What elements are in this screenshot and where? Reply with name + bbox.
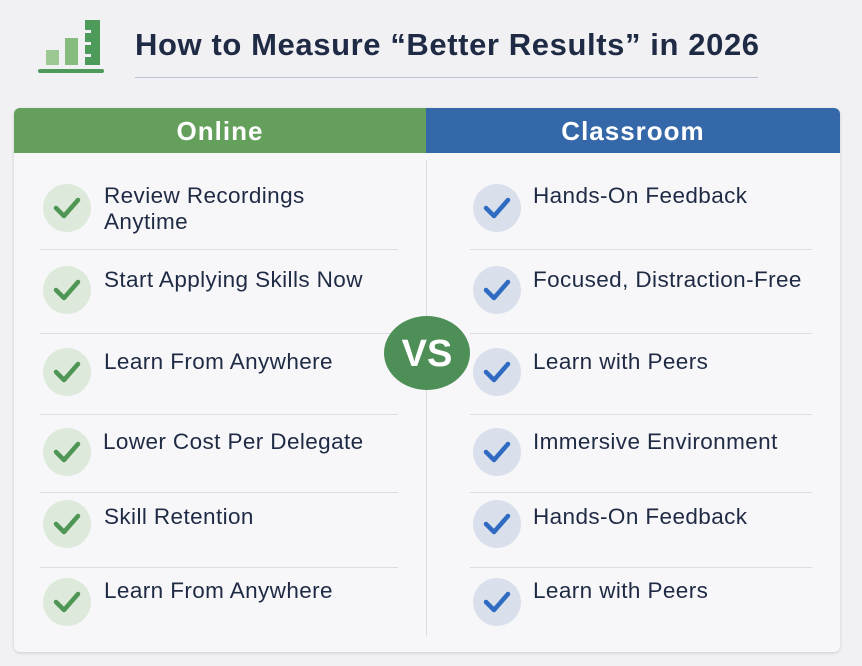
item	[473, 500, 747, 548]
item: Hands-On Feedback	[533, 504, 747, 529]
item: Learn From Anywhere	[104, 349, 333, 374]
header: Classroom	[426, 108, 840, 153]
badge: VS: VS	[402, 333, 452, 375]
item	[43, 428, 364, 476]
header: Online: Online	[177, 116, 263, 146]
item	[43, 578, 333, 626]
list: Classroom	[473, 183, 802, 626]
item	[43, 266, 363, 314]
item: Skill Retention	[104, 504, 254, 529]
item: Learn From Anywhere	[104, 578, 333, 603]
list: Online	[43, 183, 364, 626]
item	[473, 183, 747, 232]
panel: comparison	[14, 108, 840, 652]
icon: bar chart	[38, 20, 104, 73]
item	[473, 428, 778, 476]
badge: VS	[384, 316, 470, 390]
item: Immersive Environment	[533, 429, 778, 454]
item: Lower Cost Per Delegate	[103, 429, 364, 454]
item: Start Applying Skills Now	[104, 267, 363, 292]
item	[43, 348, 333, 396]
item	[43, 183, 305, 234]
title: How to Measure “Better Results” in 2026	[135, 27, 760, 62]
header: Online	[14, 108, 426, 153]
item: Hands-On Feedback	[533, 183, 747, 208]
header: Classroom: Classroom	[561, 116, 705, 146]
item: Learn with Peers	[533, 578, 708, 603]
item: Focused, Distraction-Free	[533, 267, 802, 292]
item	[43, 500, 254, 548]
item	[473, 578, 708, 626]
item	[473, 348, 708, 396]
item: Anytime	[104, 209, 188, 234]
item	[473, 266, 802, 314]
item: Learn with Peers	[533, 349, 708, 374]
item: Review Recordings	[104, 183, 305, 208]
